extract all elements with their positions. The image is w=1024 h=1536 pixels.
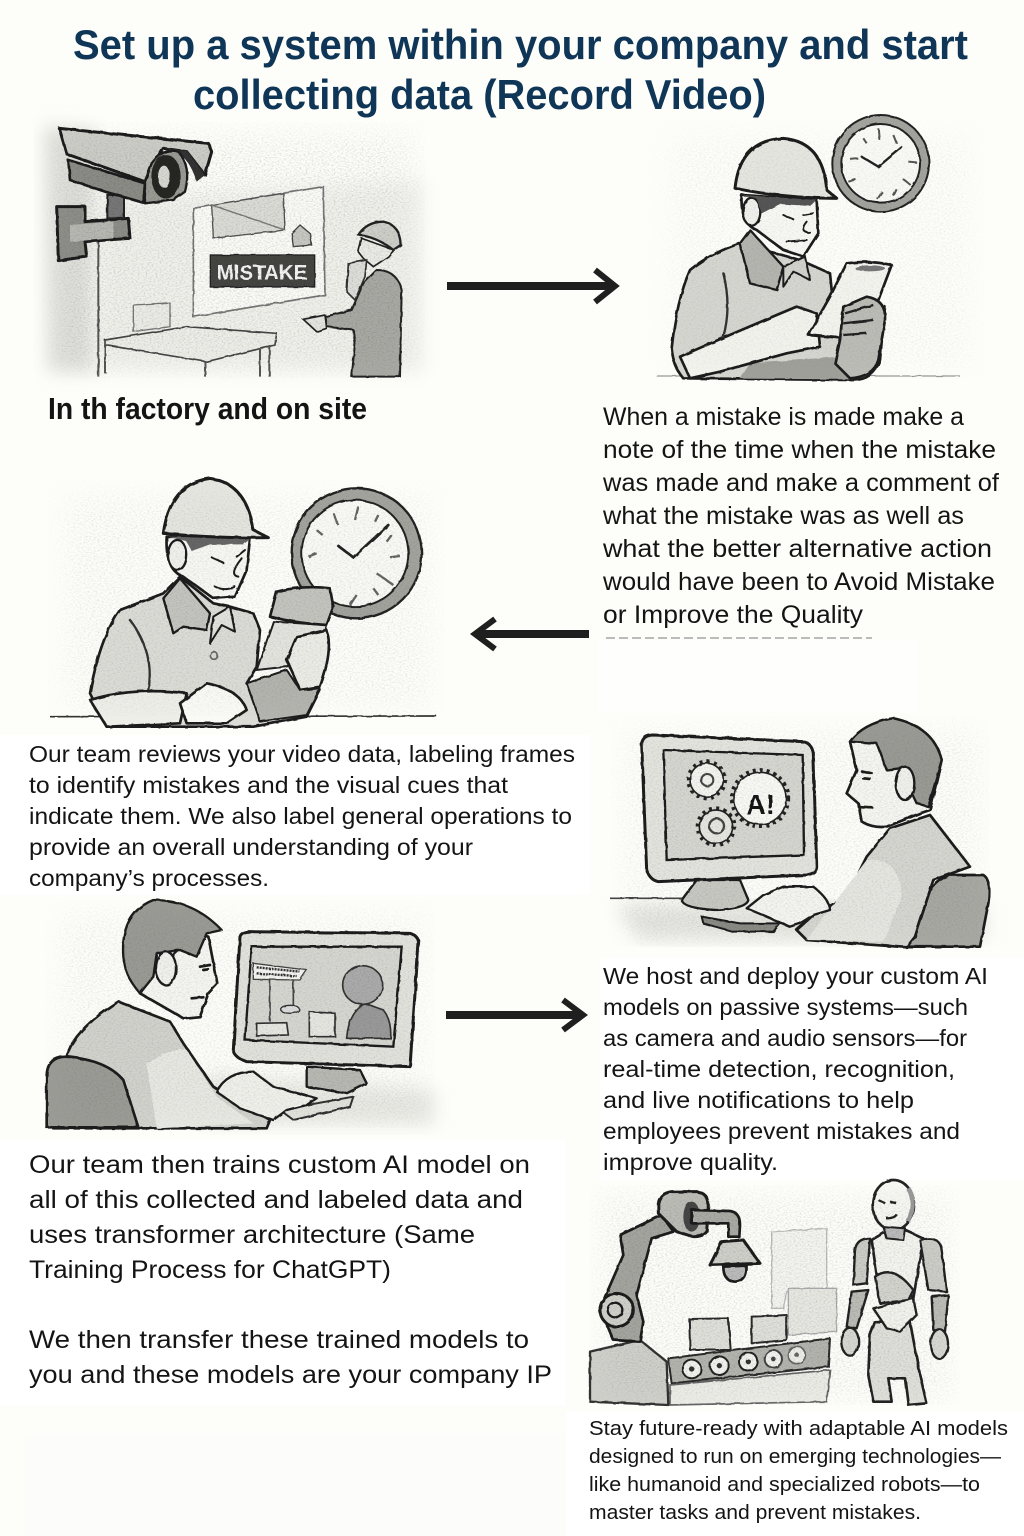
title: Set up a system within your company and start [73,21,968,68]
text: team reviews and labels video: provide an overall understanding of your [29,834,473,860]
camera on wall mount [57,128,212,261]
text: future-ready caption: like humanoid and specialized robots—to [589,1474,980,1496]
text: host and deploy models: and live notifications to help [603,1087,914,1113]
illustration: worker noting mistake time on a tablet [650,115,985,380]
text: host and deploy models: employees prevent mistakes and [603,1118,960,1144]
text: future-ready caption [589,1418,1008,1524]
text: future-ready caption: master tasks and prevent mistakes. [589,1502,921,1524]
text: train custom AI model and transfer IP: Our team then trains custom AI model on [29,1151,530,1179]
text: host and deploy models: models on passive systems—such [603,994,968,1020]
title [73,21,968,118]
worker pointing [303,222,402,377]
text: team reviews and labels video: to identify mistakes and the visual cues that [29,772,508,798]
text: team reviews and labels video: Our team reviews your video data, labeling frames [29,741,575,767]
worker with tablet [672,138,892,380]
illustration: robot arm camera and humanoid robot [590,1180,960,1405]
text: train custom AI model and transfer IP: all of this collected and labeled data and [29,1186,523,1214]
text: host and deploy models [603,963,988,1175]
background buildings [772,1228,837,1335]
wall clock [292,488,422,618]
wall line [95,240,101,377]
poster with MISTAKE sign: MISTAKE [217,260,307,284]
person typing [747,718,989,947]
robot arm with camera [590,1192,760,1405]
text: host and deploy models: improve quality. [603,1149,778,1175]
text: train custom AI model and transfer IP: uses transformer architecture (Same [29,1221,475,1249]
text: team reviews and labels video: indicate them. We also label general operations to [29,803,572,829]
arrow: step 2 to step 3 [475,619,589,649]
text: host and deploy models: real-time detection, recognition, [603,1056,955,1082]
desk and box [105,303,277,377]
illustration: person at monitor with AI gears [610,715,990,947]
text: host and deploy models: We host and deploy your custom AI [603,963,988,989]
humanoid robot [841,1180,948,1405]
arrow: step 5 to step 6 [446,1000,583,1030]
title: collecting data (Record Video) [193,71,766,118]
text: note the time of the mistake: note of the time when the mistake [603,436,996,464]
text: train custom AI model and transfer IP: you and these models are your company IP [29,1361,552,1389]
illustration: worker at tablet with large clock [48,478,445,727]
text: note the time of the mistake: When a mistake is made make a [603,403,964,431]
person [47,900,317,1128]
gears on screen: A! [746,789,775,820]
arrow: step 1 to step 2 [447,270,615,302]
poster with MISTAKE sign [193,187,325,317]
illustration: security camera watching a worker and a mistake sign [42,122,425,378]
text: train custom AI model and transfer IP: We then transfer these trained models to [29,1326,529,1354]
text: future-ready caption: designed to run on emerging technologies— [589,1446,1001,1468]
text: train custom AI model and transfer IP: Training Process for ChatGPT) [29,1256,391,1284]
text: team reviews and labels video [29,741,575,891]
screen contents: factory and robot [253,963,391,1038]
text: note the time of the mistake: was made and make a comment of [602,469,999,497]
text: future-ready caption: Stay future-ready with adaptable AI models [589,1418,1008,1440]
subheading: in the factory: In th factory and on site [48,391,367,426]
wall clock [832,115,929,212]
monitor [642,735,817,932]
conveyor with boxes [668,1315,830,1405]
text: team reviews and labels video: company’s processes. [29,865,269,891]
text: note the time of the mistake: what the better alternative action [602,535,992,563]
monitor [233,932,419,1120]
text: note the time of the mistake: would have been to Avoid Mistake [602,568,995,596]
worker [90,478,333,727]
text: note the time of the mistake [602,403,999,629]
illustration: person viewing trained AI on monitor [45,900,435,1128]
text: note the time of the mistake: or Improve the Quality [603,601,864,629]
gears on screen [688,761,788,845]
text: host and deploy models: as camera and audio sensors—for [603,1025,967,1051]
text: note the time of the mistake: what the mistake was as well as [602,502,964,530]
text: train custom AI model and transfer IP [29,1151,552,1389]
